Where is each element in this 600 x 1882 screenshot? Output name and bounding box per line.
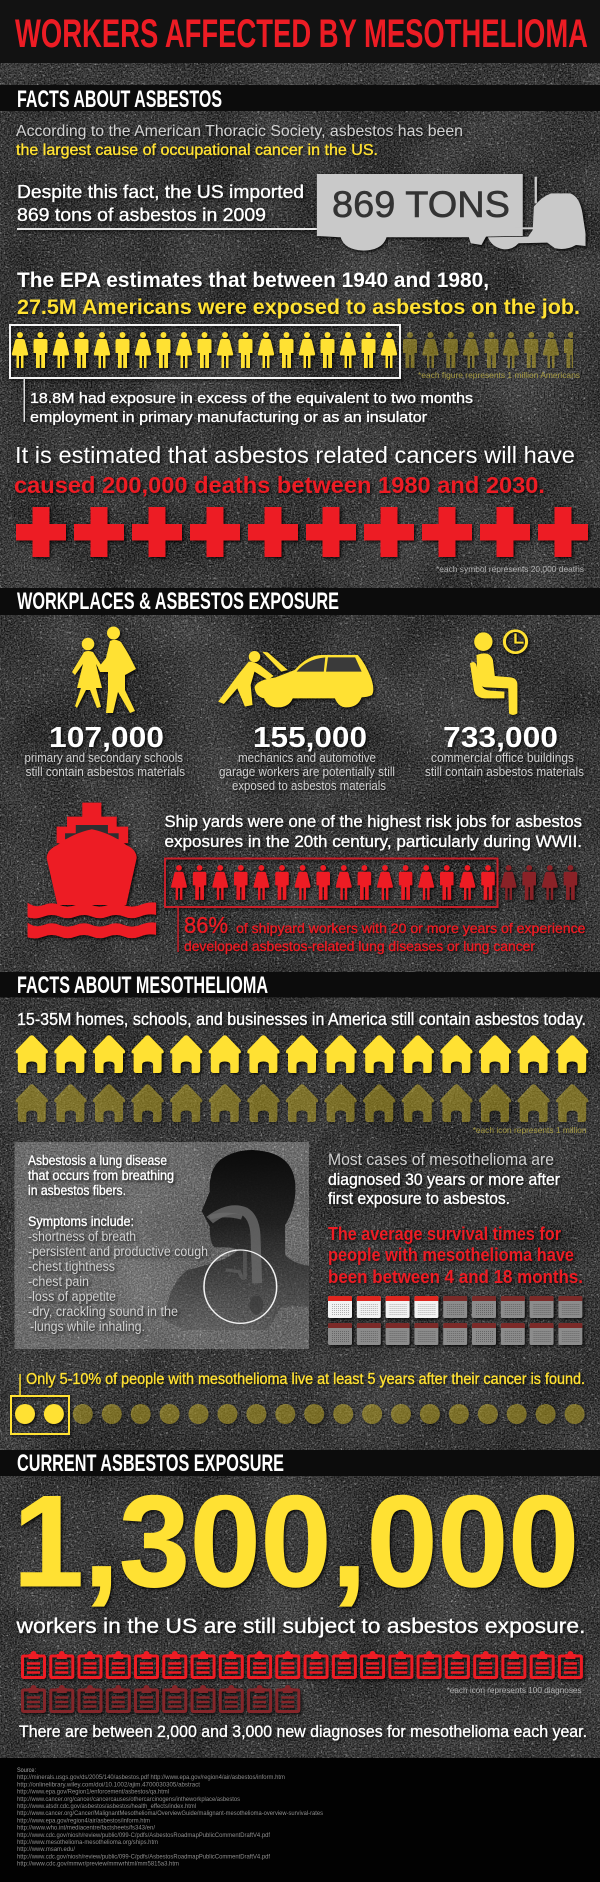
text: asbestosis definition: -persistent and productive cough xyxy=(28,1244,208,1259)
sources footer: http://minerals.usgs.gov/ds/2005/140/asbestos.pdf http://www.epa.gov/region4/air/asbestos/inform.htm xyxy=(17,1774,285,1781)
text: survival times: people with mesothelioma have xyxy=(328,1245,574,1265)
text: asbestosis definition: Asbestosis a lung disease xyxy=(28,1153,167,1168)
text: thoracic society statement xyxy=(16,123,463,159)
sources footer: http://www.cancer.org/cancer/cancercauses/othercarcinogens/intheworkplace/asbestos xyxy=(17,1796,240,1803)
text: asbestosis definition: -loss of appetite xyxy=(28,1289,116,1304)
text: survival times xyxy=(328,1224,583,1287)
stat: mechanics: 155,000 xyxy=(253,722,367,754)
stat: schools: primary and secondary schools xyxy=(24,751,183,765)
section heading: current asbestos exposure xyxy=(0,1450,600,1477)
text: EPA estimate: The EPA estimates that between 1940 and 1980, xyxy=(17,269,489,292)
text: asbestosis definition: -shortness of breath xyxy=(28,1229,136,1244)
stat: mechanics: mechanics and automotive xyxy=(238,751,376,765)
text: asbestosis definition xyxy=(28,1153,208,1334)
sources footer: http://onlinelibrary.wiley.com/doi/10.1002/ajim.4700030305/abstract xyxy=(17,1781,200,1788)
icon: truck with 869 tons xyxy=(317,174,586,251)
sources footer xyxy=(0,1758,600,1882)
text: thoracic society statement: According to the American Thoracic Society, asbestos has been xyxy=(16,123,463,140)
caption: cross legend: *each symbol represents 20,000 deaths xyxy=(436,564,584,574)
text: asbestosis definition: that occurs from breathing xyxy=(28,1168,174,1183)
stat: schools: still contain asbestos materials xyxy=(26,765,185,779)
caption: figure legend: *each figure represents 1 million Americans xyxy=(418,370,580,380)
caption: clipboard legend: *each icon represents 100 diagnoses xyxy=(447,1685,582,1695)
chart: calendars xyxy=(328,1296,582,1345)
section heading: workplaces: WORKPLACES & ASBESTOS EXPOSURE xyxy=(17,588,339,615)
text: survival times: The average survival times for xyxy=(328,1224,561,1244)
text: ship yards xyxy=(164,813,582,851)
text: asbestosis definition: -chest pain xyxy=(28,1274,89,1289)
illustration: head and airway silhouette xyxy=(165,1150,309,1330)
text: tons imported: Despite this fact, the US imported xyxy=(17,182,304,202)
stat: office buildings: still contain asbestos materials xyxy=(425,765,584,779)
stat: mechanics: garage workers are potentially still xyxy=(219,765,395,779)
sources footer: http://www.mesothelioma-mesothelioma.org/ships.htm xyxy=(17,1839,158,1846)
text: workers still exposed: workers in the US are still subject to asbestos exposure. xyxy=(15,1615,586,1638)
section heading: facts about asbestos: FACTS ABOUT ASBESTOS xyxy=(17,86,222,113)
text: survival times: been between 4 and 18 months. xyxy=(328,1267,583,1287)
callout: 18.8M exposure xyxy=(24,378,473,426)
title band xyxy=(0,0,600,63)
text: thoracic society statement: the largest cause of occupational cancer in the US. xyxy=(16,142,378,159)
sources footer: http://www.epa.gov/Region1/enforcement/asbestos/qa.html xyxy=(17,1788,169,1796)
section heading: facts about mesothelioma xyxy=(0,972,600,999)
chart: 27.5 million people pictogram xyxy=(10,325,578,378)
text: EPA estimate xyxy=(17,269,580,319)
text: cancer deaths estimate: It is estimated that asbestos related cancers will have xyxy=(15,442,575,468)
stat: schools xyxy=(24,626,185,779)
stat: office buildings xyxy=(425,631,584,779)
stat: mechanics xyxy=(218,651,395,793)
text: diagnosis timing xyxy=(328,1150,560,1208)
callout: 86 percent: 86% xyxy=(184,912,228,938)
text: diagnosis timing: first exposure to asbestos. xyxy=(328,1189,510,1208)
panel: asbestosis symptoms xyxy=(14,1142,309,1349)
text: cancer deaths estimate xyxy=(14,442,575,498)
callout: 18.8M exposure: employment in primary manufacturing or as an insulator xyxy=(30,409,427,426)
stat: office buildings: commercial office buildings xyxy=(431,751,574,765)
text: asbestosis definition: in asbestos fibers. xyxy=(28,1183,126,1198)
sources footer: http://www.atsdr.cdc.gov/asbestos/asbestos/health_effects/index.html xyxy=(17,1803,196,1810)
text: asbestosis definition: -chest tightness xyxy=(28,1259,115,1274)
sources footer: http://www.cdc.gov/mmwr/preview/mmwrhtml/mm5815a3.htm xyxy=(17,1861,179,1868)
text: ship yards: exposures in the 20th century, particularly during WWII. xyxy=(164,833,582,851)
icon: truck with 869 tons: 869 TONS xyxy=(332,184,510,225)
chart: survival dots xyxy=(11,1374,585,1434)
callout: 18.8M exposure: 18.8M had exposure in excess of the equivalent to two months xyxy=(30,390,473,407)
section heading: facts about mesothelioma: FACTS ABOUT MESOTHELIOMA xyxy=(17,972,268,999)
callout: 86 percent: developed asbestos-related lung diseases or lung cancer xyxy=(184,938,535,954)
stat: office buildings: 733,000 xyxy=(443,722,558,754)
text: asbestosis definition: Symptoms include: xyxy=(28,1214,134,1229)
sources footer: http://www.cancer.org/Cancer/MalignantMesothelioma/OverviewGuide/malignant-mesothelioma-overview-survival-rates xyxy=(17,1810,323,1817)
text: tons imported: 869 tons of asbestos in 2009 xyxy=(17,205,266,225)
text: EPA estimate: 27.5M Americans were exposed to asbestos on the job. xyxy=(17,296,580,319)
section heading: facts about asbestos xyxy=(0,85,600,113)
callout: 86 percent xyxy=(177,907,586,954)
text: diagnosis timing: Most cases of mesothelioma are xyxy=(328,1150,554,1169)
icon: ship on waves xyxy=(28,803,156,938)
stat: mechanics: exposed to asbestos materials xyxy=(232,779,386,793)
chart: shipyard workers pictogram xyxy=(165,858,577,907)
sources footer: http://www.cdc.gov/niosh/review/public/099-C/pdfs/AsbestosRoadmapPublicCommentDraftV4.pdf xyxy=(17,1853,270,1860)
sources footer: http://www.epa.gov/region4/air/asbestos/inform.htm xyxy=(17,1817,150,1824)
text: asbestosis definition: -dry, crackling sound in the xyxy=(28,1304,178,1319)
callout: 86 percent: of shipyard workers with 20 or more years of experience xyxy=(236,920,586,936)
caption: house legend: *each icon represents 1 million xyxy=(473,1125,587,1135)
sources footer: Source: xyxy=(17,1767,36,1774)
icon: mechanic at car xyxy=(218,651,373,707)
big number: 1,300,000: 1,300,000 xyxy=(13,1468,579,1614)
text: tons imported xyxy=(17,182,318,230)
icon: seated person with clock xyxy=(470,631,527,715)
icon: adult and child walking xyxy=(72,626,136,713)
sources footer: http://www.who.int/mediacentre/factsheets/fs343/en/ xyxy=(17,1825,155,1832)
section heading: current asbestos exposure: CURRENT ASBESTOS EXPOSURE xyxy=(17,1450,284,1477)
text: diagnosis timing: diagnosed 30 years or more after xyxy=(328,1170,560,1189)
stat: schools: 107,000 xyxy=(49,722,164,754)
text: asbestosis definition: -lungs while inhaling. xyxy=(30,1319,145,1334)
text: ship yards: Ship yards were one of the highest risk jobs for asbestos xyxy=(164,813,582,831)
chart: houses pictogram xyxy=(16,1035,588,1122)
chart: clipboards xyxy=(22,1651,581,1712)
text: cancer deaths estimate: caused 200,000 deaths between 1980 and 2030. xyxy=(14,472,545,498)
sources footer: http://www.cdc.gov/niosh/review/public/099-C/pdfs/AsbestosRoadmapPublicCommentDraftV4.pdf xyxy=(17,1832,270,1839)
chart: red crosses xyxy=(16,507,588,557)
sources footer: http://www.msam.edu/ xyxy=(17,1846,75,1853)
